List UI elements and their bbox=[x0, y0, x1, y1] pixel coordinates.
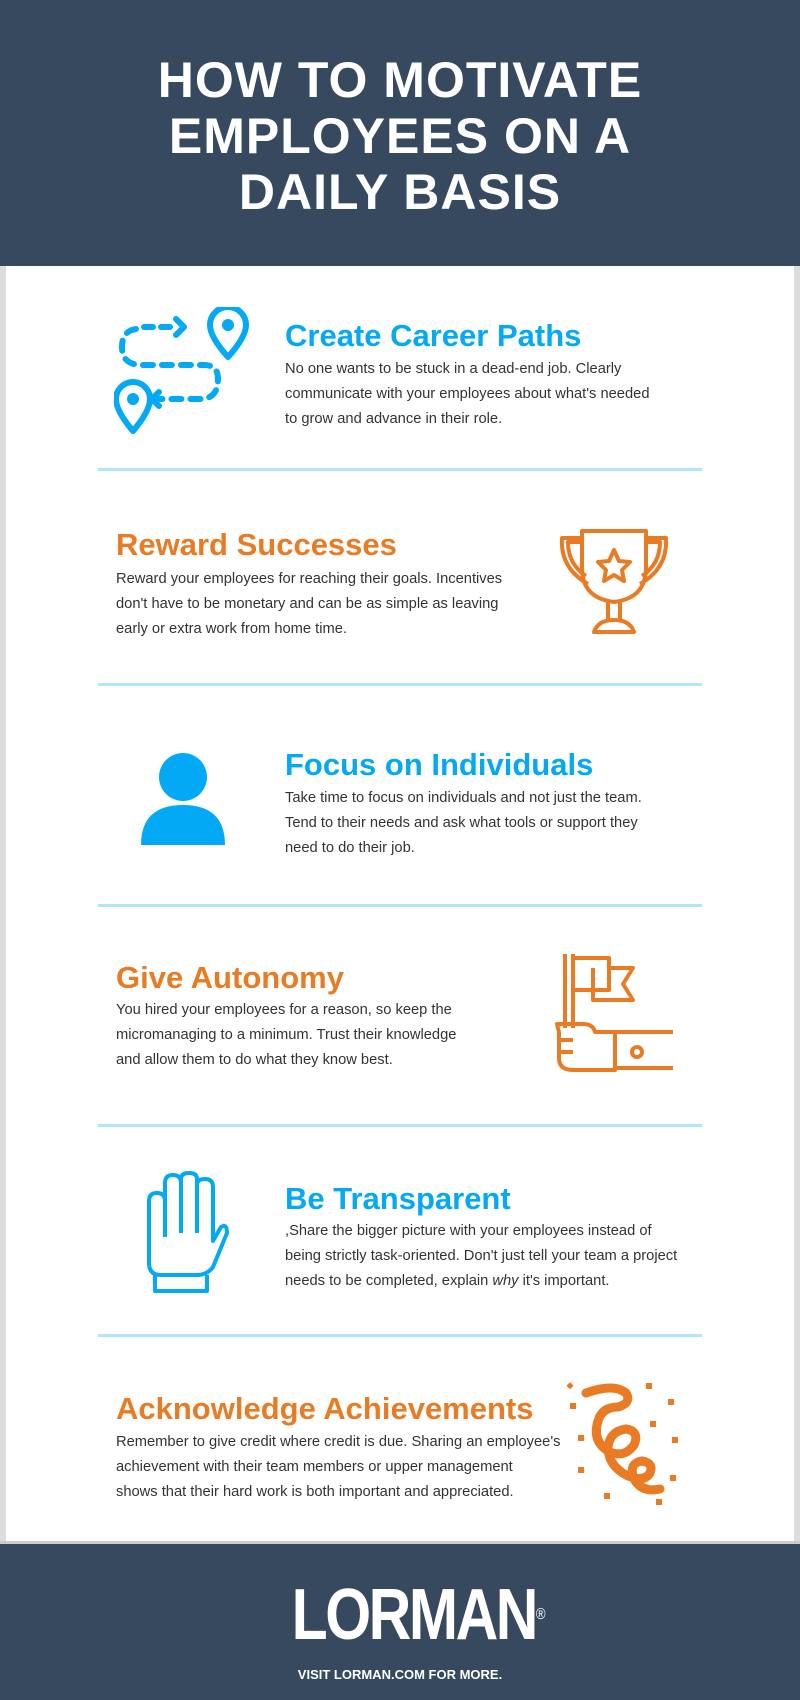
text: individuals: need to do their job. bbox=[285, 840, 415, 856]
logo: LORMAN: LORMAN® bbox=[292, 1575, 546, 1655]
title bbox=[158, 52, 642, 220]
footer bbox=[0, 1541, 800, 1700]
heading: create career paths: Create Career Paths bbox=[285, 318, 581, 353]
text: transparent: being strictly task-oriented. Don't just tell your team a project bbox=[285, 1248, 677, 1264]
text: individuals: Tend to their needs and ask what tools or support they bbox=[285, 815, 638, 831]
icon: confetti bbox=[566, 1382, 678, 1505]
text: transparent: needs to be completed, explain why it's important. bbox=[285, 1273, 610, 1289]
text: career paths bbox=[285, 361, 649, 427]
title: HOW TO MOTIVATE bbox=[158, 52, 642, 108]
text: autonomy: and allow them to do what they know best. bbox=[116, 1052, 393, 1068]
icon: hand with flag bbox=[555, 954, 673, 1072]
text: reward: don't have to be monetary and can be as simple as leaving bbox=[116, 596, 498, 612]
text: reward: Reward your employees for reaching their goals. Incentives bbox=[116, 571, 502, 587]
text: career paths: No one wants to be stuck in a dead-end job. Clearly bbox=[285, 361, 621, 377]
text: transparent bbox=[285, 1223, 678, 1289]
text: career paths: communicate with your employees about what's needed bbox=[285, 386, 649, 402]
icon: person bbox=[141, 753, 225, 845]
heading: give autonomy: Give Autonomy bbox=[116, 960, 344, 995]
text: autonomy bbox=[116, 1002, 456, 1068]
text: achievements bbox=[116, 1434, 560, 1500]
icon: hand bbox=[147, 1171, 229, 1293]
text: reward bbox=[116, 571, 502, 637]
text: achievements: Remember to give credit where credit is due. Sharing an employee's bbox=[116, 1434, 560, 1450]
text: achievements: shows that their hard work is both important and appreciated. bbox=[116, 1484, 514, 1500]
text: individuals bbox=[285, 790, 642, 856]
heading: be transparent: Be Transparent bbox=[285, 1181, 511, 1216]
heading: reward successes: Reward Successes bbox=[116, 527, 397, 562]
text: autonomy: micromanaging to a minimum. Trust their knowledge bbox=[116, 1027, 456, 1043]
heading: acknowledge achievements: Acknowledge Achievements bbox=[116, 1391, 534, 1426]
footer text: VISIT LORMAN.COM FOR MORE. bbox=[298, 1667, 502, 1682]
icon: trophy bbox=[560, 529, 668, 634]
heading: focus on individuals: Focus on Individuals bbox=[285, 747, 593, 782]
title: EMPLOYEES ON A bbox=[169, 108, 631, 164]
header bbox=[0, 0, 800, 266]
icon: career path bbox=[114, 307, 249, 434]
text: transparent: ,Share the bigger picture with your employees instead of bbox=[285, 1223, 652, 1239]
title: DAILY BASIS bbox=[239, 164, 561, 220]
text: career paths: to grow and advance in their role. bbox=[285, 411, 502, 427]
text: autonomy: You hired your employees for a reason, so keep the bbox=[116, 1002, 452, 1018]
text: achievements: achievement with their team members or upper management bbox=[116, 1459, 513, 1475]
text: individuals: Take time to focus on individuals and not just the team. bbox=[285, 790, 642, 806]
text: reward: early or extra work from home time. bbox=[116, 621, 347, 637]
